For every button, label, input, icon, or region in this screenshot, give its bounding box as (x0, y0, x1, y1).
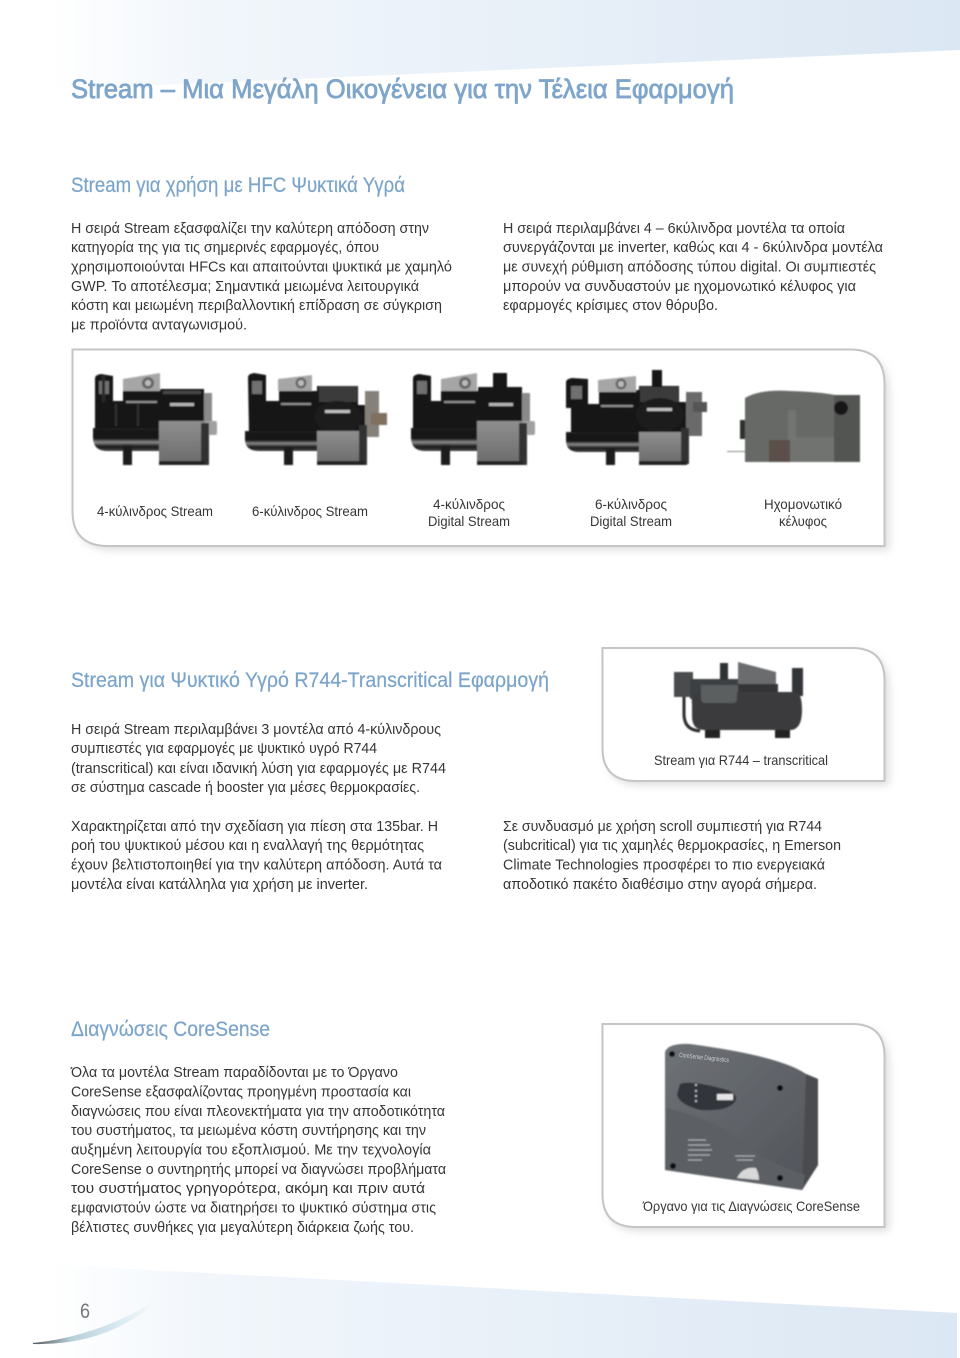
text block: CoreSense description: CoreSense ο συντηρητής μπορεί να διαγνώσει προβλήματα (71, 1162, 446, 1178)
caption: acoustic enclosure: Ηχομονωτικό (764, 497, 842, 512)
text block: CoreSense description: του συστήματος, τα μειωμένα κόστη συντήρησης και την (71, 1123, 426, 1139)
caption: 6-cylinder Digital Stream (590, 497, 672, 529)
text block: CoreSense description (70, 1065, 446, 1236)
caption: 4-cylinder Digital Stream: Digital Stream (428, 514, 510, 529)
caption: R744 compressor: Stream για R744 – transcritical (654, 753, 828, 768)
icon: 4-cylinder Digital Stream compressor (411, 373, 535, 465)
text block: R744 scroll combination (503, 819, 841, 893)
text block: R744 features: έχουν βελτιστοποιηθεί για την καλύτερη απόδοση. Αυτά τα (71, 858, 442, 874)
text block: HFC right column: συνεργάζονται με inverter, καθώς και 4 - 6κύλινδρα μοντέλα (503, 240, 883, 256)
text block: HFC right column: με συνεχή ρύθμιση απόδοσης τύπου digital. Οι συμπιεστές (503, 260, 876, 276)
text block: R744 features: ροή του ψυκτικού μέσου και η εναλλαγή της θερμότητας (71, 838, 424, 854)
text block: R744 features (71, 819, 442, 893)
text block: CoreSense description: CoreSense εξασφαλίζοντας προηγμένη προστασία και (71, 1084, 411, 1100)
text block: CoreSense description: εμφανιστούν ώστε να διατηρήσει το ψυκτικό σύστημα στις (71, 1200, 436, 1216)
text block: R744 intro (71, 722, 446, 796)
caption: 4-cylinder Digital Stream (428, 497, 510, 529)
text block: R744 features: Χαρακτηρίζεται από την σχεδίαση για πίεση στα 135bar. Η (71, 819, 438, 835)
text block: R744 intro: Η σειρά Stream περιλαμβάνει 3 μοντέλα από 4-κύλινδρους (71, 722, 441, 738)
text block: CoreSense description: αυξημένη λειτουργία του εξοπλισμού. Με την τεχνολογία (71, 1142, 431, 1158)
text block: R744 intro: (transcritical) και είναι ιδανική λύση για εφαρμογές με R744 (71, 761, 446, 777)
caption: acoustic enclosure: κέλυφος (779, 514, 827, 529)
text block: R744 scroll combination: Climate Technologies προσφέρει το πιο ενεργειακά (503, 858, 825, 874)
icon: acoustic enclosure (727, 391, 860, 462)
caption: 6-cylinder Digital Stream: 6-κύλινδρος (595, 497, 667, 512)
caption: 4-cylinder Digital Stream: 4-κύλινδρος (433, 497, 505, 512)
icon: R744 transcritical compressor (674, 662, 803, 738)
text block: R744 intro: σε σύστημα cascade ή booster για μέσες θερμοκρασίες. (71, 780, 420, 796)
heading: R744 section: Stream για Ψυκτικό Υγρό R744-Transcritical Εφαρμογή (71, 669, 549, 692)
text block: CoreSense description: του συστήματος γρηγορότερα, ακόμη και πριν αυτά (71, 1181, 425, 1197)
background: bottom gradient wedge (0, 1262, 957, 1358)
text block: HFC right column: Η σειρά περιλαμβάνει 4 – 6κύλινδρα μοντέλα τα οποία (503, 221, 845, 237)
text block: R744 scroll combination: αποδοτικό πακέτο διαθέσιμο στην αγορά σήμερα. (503, 877, 817, 893)
text block: HFC right column: μπορούν να συνδυαστούν με ηχομονωτικό κέλυφος για (503, 279, 856, 295)
caption: 6-cylinder Stream: 6-κύλινδρος Stream (252, 504, 368, 519)
icon: CoreSense diagnostics module: CoreSense Diagnostics (679, 1052, 730, 1064)
panel: compressor range (72, 350, 889, 550)
text block: R744 intro: συμπιεστές για εφαρμογές με ψυκτικό υγρό R744 (71, 741, 377, 757)
text block: HFC left column: με προϊόντα ανταγωνισμού. (71, 318, 247, 334)
text block: HFC left column: κατηγορία της για τις σημερινές εφαρμογές, όπου (71, 240, 379, 256)
page number: 6 (80, 1300, 90, 1323)
text block: HFC left column: GWP. Το αποτέλεσμα; Σημαντικά μειωμένα λειτουργικά (71, 279, 419, 295)
text block: R744 scroll combination: (subcritical) για τις χαμηλές θερμοκρασίες, η Emerson (503, 838, 841, 854)
text block: HFC right column (503, 221, 883, 314)
icon: 4-cylinder Stream compressor (93, 373, 217, 465)
icon: 6-cylinder Digital Stream compressor (566, 370, 707, 465)
text block: HFC right column: εφαρμογές κρίσιμες στον θόρυβο. (503, 298, 718, 314)
text block: HFC left column: Η σειρά Stream εξασφαλίζει την καλύτερη απόδοση στην (71, 221, 429, 237)
background: top gradient wedge (0, 0, 960, 92)
icon: CoreSense diagnostics module (665, 1044, 818, 1190)
caption: 4-cylinder Stream: 4-κύλινδρος Stream (97, 504, 213, 519)
text block: CoreSense description: διαγνώσεις που είναι πλεονεκτήματα για την αποδοτικότητα (71, 1104, 445, 1120)
text block: HFC left column: χρησιμοποιούνται HFCs και απαιτούνται ψυκτικά με χαμηλό (71, 260, 452, 276)
panel: CoreSense device (602, 1024, 889, 1231)
text block: CoreSense description: Όλα τα μοντέλα Stream παραδίδονται με το Όργανο (70, 1065, 398, 1081)
title: Stream – Μια Μεγάλη Οικογένεια για την Τέλεια Εφαρμογή (71, 74, 734, 104)
caption: 6-cylinder Digital Stream: Digital Stream (590, 514, 672, 529)
text block: HFC left column: κόστη και μειωμένη περιβαλλοντική επίδραση σε σύγκριση (71, 298, 442, 314)
text block: HFC left column (71, 221, 452, 334)
text block: CoreSense description: βέλτιστες συνθήκες για μεγαλύτερη διάρκεια ζωής του. (71, 1220, 414, 1236)
panel: R744 compressor (602, 648, 889, 785)
caption: acoustic enclosure (764, 497, 842, 529)
heading: CoreSense section: Διαγνώσεις CoreSense (71, 1018, 270, 1041)
text block: R744 features: μοντέλα είναι κατάλληλα για χρήση με inverter. (71, 877, 368, 893)
icon: 6-cylinder Stream compressor (245, 373, 387, 465)
caption: CoreSense device: Όργανο για τις Διαγνώσεις CoreSense (642, 1199, 860, 1214)
text block: R744 scroll combination: Σε συνδυασμό με χρήση scroll συμπιεστή για R744 (503, 819, 822, 835)
heading: HFC section: Stream για χρήση με HFC Ψυκτικά Υγρά (71, 174, 405, 197)
swoosh (33, 1298, 160, 1344)
